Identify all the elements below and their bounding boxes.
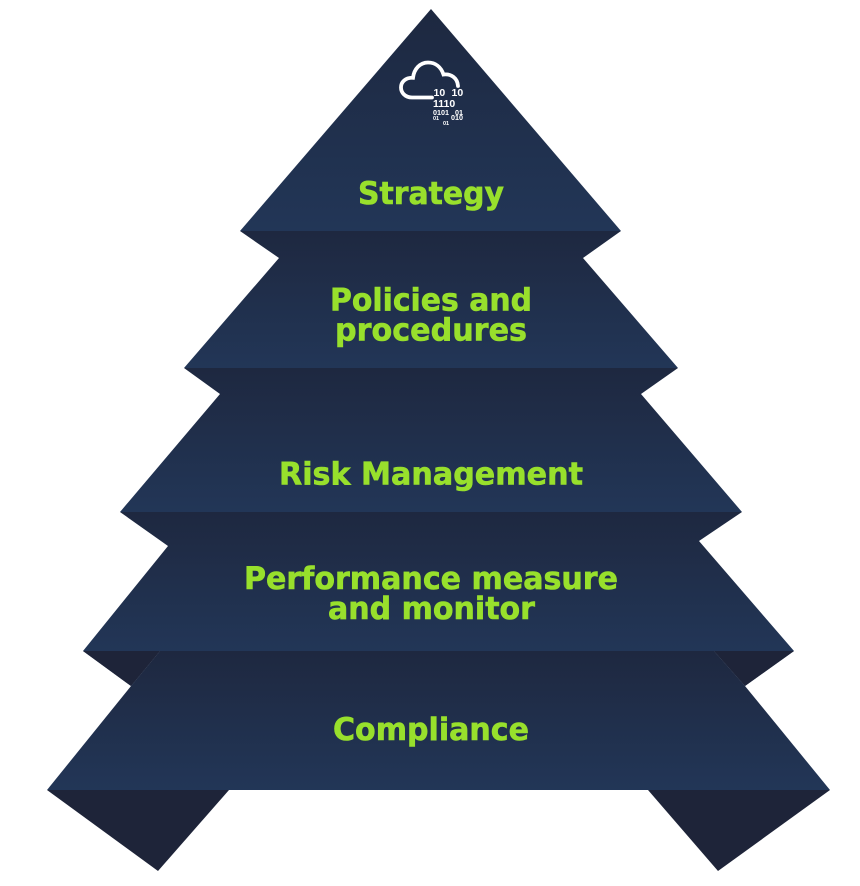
tier: compliance (47, 651, 830, 790)
icon: cloud with binary digits: 01 (455, 108, 463, 117)
icon: cloud with binary digits (401, 62, 463, 127)
heading: Performance measure and monitor: Performance measure (244, 561, 618, 597)
icon: cloud with binary digits: 0101 (433, 108, 449, 117)
heading: Policies and procedures: Policies and (330, 282, 532, 318)
icon: cloud with binary digits: 10 (434, 87, 445, 99)
icon: cloud with binary digits: 1110 (433, 98, 455, 110)
icon: cloud with binary digits: 01 (443, 121, 449, 127)
heading: Performance measure and monitor: and monitor (328, 591, 536, 627)
tier: policies and procedures (184, 231, 678, 368)
heading: Performance measure and monitor (244, 561, 618, 627)
tier: strategy (240, 9, 621, 231)
bottom right fold (648, 790, 830, 871)
heading: Risk Management: Risk Management (279, 456, 583, 492)
heading: Policies and procedures (330, 282, 532, 348)
tier: performance measure and monitor (83, 512, 794, 686)
heading: Strategy: Strategy (358, 176, 504, 212)
bottom left fold (47, 790, 229, 871)
icon: cloud with binary digits: 010 (451, 113, 463, 122)
left fold of tier 4 (83, 651, 160, 686)
heading: Compliance: Compliance (333, 712, 529, 748)
tier: risk management (120, 368, 742, 512)
heading: Policies and procedures: procedures (335, 312, 527, 348)
icon: cloud with binary digits: 01 (433, 116, 439, 122)
icon: cloud with binary digits: 10 (452, 87, 463, 99)
right fold of tier 4 (714, 651, 794, 686)
